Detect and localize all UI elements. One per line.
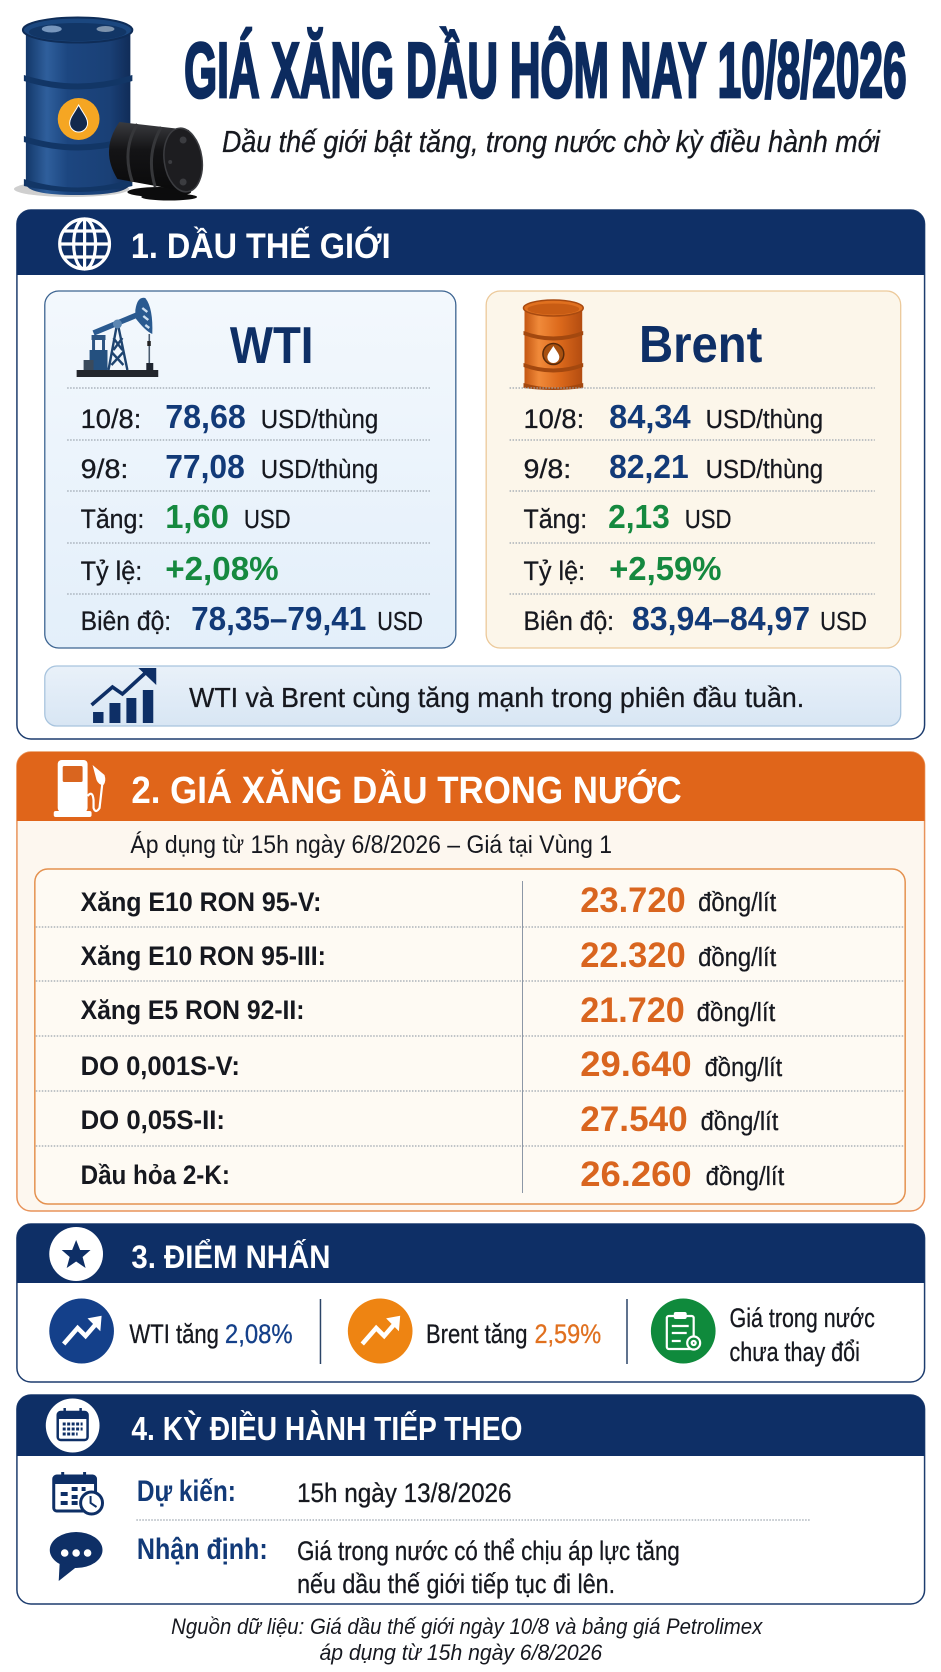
row: 10/8: 10/8: [81,404,141,434]
source note [171,1614,763,1665]
item: Brent up [348,1298,601,1364]
item: Brent up: 2,59% [534,1319,601,1349]
row: rate [81,550,279,587]
callout text: WTI và Brent cùng tăng mạnh trong phiên đầu tuần. [189,682,804,713]
row: rate: Tỷ lệ: [81,556,142,586]
row: DO 0,001S-V: DO 0,001S-V: [81,1051,240,1081]
row: 9/8: 9/8: [523,454,571,484]
row: kerosene: đồng/lít [706,1163,785,1191]
row: increase [81,498,291,535]
row: 9/8: USD/thùng [261,456,378,484]
row: E10 RON 95-III: 22.320 [580,936,686,975]
row: increase: Tăng: [523,504,587,534]
icon: speech bubble [50,1532,103,1581]
row: DO 0,05S-II: đồng/lít [701,1108,779,1136]
row: E5 RON 92-II [81,991,776,1030]
section header: next adjustment [17,1395,925,1456]
table: fuel prices [35,869,905,1204]
row: increase: Tăng: [81,504,144,534]
row: 10/8 [81,398,378,435]
icon: star [49,1227,103,1281]
row: range [81,600,423,637]
row: range: Biên độ: [81,606,171,636]
row: E10 RON 95-V: Xăng E10 RON 95-V: [81,887,321,917]
row: E10 RON 95-V: 23.720 [580,881,686,920]
section header: highlights [17,1224,925,1283]
row: 9/8: USD/thùng [706,456,823,484]
section header: world oil [17,210,925,275]
source note: áp dụng từ 15h ngày 6/8/2026 [319,1640,603,1665]
row: 9/8: 77,08 [165,448,245,485]
value: assessment text: nếu dầu thế giới tiếp tục đi lên. [297,1569,615,1599]
item: domestic unchanged: Giá trong nước [730,1303,875,1333]
row: DO 0,05S-II: 27.540 [580,1100,688,1139]
callout: WTI and Brent rise [45,666,901,726]
value: expected date: 15h ngày 13/8/2026 [297,1478,512,1508]
heading: world oil: 1. DẦU THẾ GIỚI [131,226,391,266]
row: 9/8 [81,448,378,485]
item: domestic unchanged: chưa thay đổi [730,1337,860,1367]
row: E10 RON 95-III: đồng/lít [698,944,777,972]
row: increase: USD [244,506,291,534]
icon: oil barrels [14,18,206,200]
row: 10/8 [523,398,823,435]
card: WTI [45,291,456,648]
row: DO 0,001S-V: đồng/lít [705,1054,783,1082]
icon: calendar [46,1398,100,1452]
row: E10 RON 95-III [81,936,777,975]
icon: pump jack [77,298,158,377]
panel: world oil [17,210,925,739]
row: kerosene: Dầu hỏa 2-K: [81,1160,230,1190]
row: E5 RON 92-II: 21.720 [580,991,685,1030]
row: 9/8 [523,448,823,485]
row: range: 83,94–84,97 [632,600,810,637]
icon: fuel pump [54,760,105,817]
row: 10/8: USD/thùng [706,406,823,434]
row: rate: +2,59% [609,550,722,587]
value: assessment text: Giá trong nước có thể chịu áp lực tăng [297,1536,680,1566]
row: E10 RON 95-V [81,881,777,920]
row: kerosene: 26.260 [580,1155,692,1194]
row: range: USD [377,608,423,636]
row: increase [523,498,732,535]
row: 9/8: 9/8: [81,454,128,484]
row: E5 RON 92-II: Xăng E5 RON 92-II: [81,995,305,1025]
heading: Brent: Brent [639,315,762,373]
row: 9/8: 82,21 [609,448,689,485]
value: assessment text [297,1536,680,1599]
item: domestic unchanged [651,1298,875,1367]
item: WTI up: 2,08% [225,1319,293,1349]
row: 10/8: 78,68 [165,398,246,435]
icon: globe [60,219,109,269]
row: range: USD [820,608,867,636]
icon: rising chart [92,668,156,723]
panel: domestic prices [17,752,925,1211]
heading: WTI: WTI [230,316,314,374]
label: expected: Dự kiến: [137,1475,236,1508]
icon: orange barrel [523,300,583,390]
row: rate: Tỷ lệ: [523,556,585,586]
row: range: Biên độ: [523,606,614,636]
section header: domestic prices [17,752,925,821]
row: increase: 2,13 [608,498,670,535]
row: DO 0,001S-V: 29.640 [580,1045,692,1084]
row: range [523,600,867,637]
icon: calendar with clock [54,1472,103,1514]
item: Brent up: Brent tăng [426,1319,527,1349]
item: WTI up [49,1298,293,1364]
heading: next adjustment: 4. KỲ ĐIỀU HÀNH TIẾP THEO [131,1410,523,1447]
heading: highlights: 3. ĐIỂM NHẤN [131,1239,330,1275]
source note: Nguồn dữ liệu: Giá dầu thế giới ngày 10/8 và bảng giá Petrolimex [171,1614,763,1639]
row: DO 0,05S-II: DO 0,05S-II: [81,1105,225,1135]
panel: next adjustment [17,1395,925,1604]
row: E10 RON 95-III: Xăng E10 RON 95-III: [81,941,326,971]
row: E10 RON 95-V: đồng/lít [698,889,777,917]
row: increase: USD [685,506,732,534]
item: WTI up: WTI tăng [129,1319,219,1349]
row: rate [523,550,722,587]
row: DO 0,05S-II [81,1100,779,1139]
note: effective time: Áp dụng từ 15h ngày 6/8/2026 – Giá tại Vùng 1 [130,830,612,859]
row: 10/8: 10/8: [523,404,584,434]
panel: highlights [17,1224,925,1382]
row: range: 78,35–79,41 [191,600,366,637]
row: 10/8: USD/thùng [261,406,378,434]
row: increase: 1,60 [165,498,229,535]
row: 10/8: 84,34 [609,398,691,435]
row: kerosene [81,1155,785,1194]
label: assessment: Nhận định: [137,1533,268,1566]
card: Brent [486,291,901,648]
row: E5 RON 92-II: đồng/lít [697,999,776,1027]
heading: domestic prices: 2. GIÁ XĂNG DẦU TRONG NƯỚC [131,768,682,812]
row: rate: +2,08% [165,550,279,587]
row: DO 0,001S-V [81,1045,783,1084]
